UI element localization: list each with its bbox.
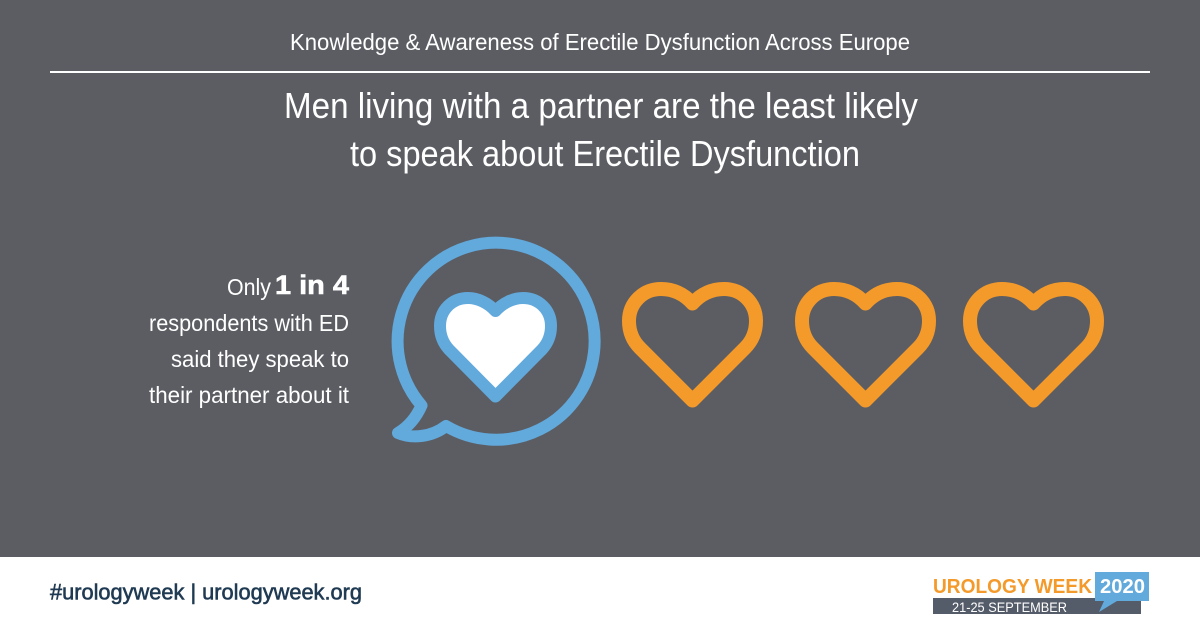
statistic text: Only (227, 274, 271, 300)
statistic text (149, 270, 350, 408)
statistic text: 1 in 4 (275, 270, 349, 300)
main heading: to speak about Erectile Dysfunction (350, 133, 860, 174)
statistic text: respondents with ED (149, 310, 349, 336)
header title: Knowledge & Awareness of Erectile Dysfunction Across Europe (290, 29, 910, 55)
icon: orange heart 3 (970, 289, 1097, 400)
logo: Urology Week 2020: 2020 (1100, 576, 1145, 598)
footer band (0, 557, 1200, 630)
main heading (284, 85, 918, 174)
logo: Urology Week 2020 (933, 572, 1149, 615)
icon: speech bubble with white heart (398, 243, 595, 440)
main heading: Men living with a partner are the least likely (284, 85, 918, 126)
logo: Urology Week 2020: UROLOGY WEEK (933, 576, 1093, 598)
statistic text: their partner about it (149, 382, 350, 408)
footer hashtag and website: #urologyweek | urologyweek.org (50, 580, 362, 604)
logo: Urology Week 2020: 21-25 SEPTEMBER (952, 599, 1067, 615)
statistic text: said they speak to (171, 346, 349, 372)
icon: orange heart 2 (802, 289, 929, 400)
icon: orange heart 1 (629, 289, 756, 400)
